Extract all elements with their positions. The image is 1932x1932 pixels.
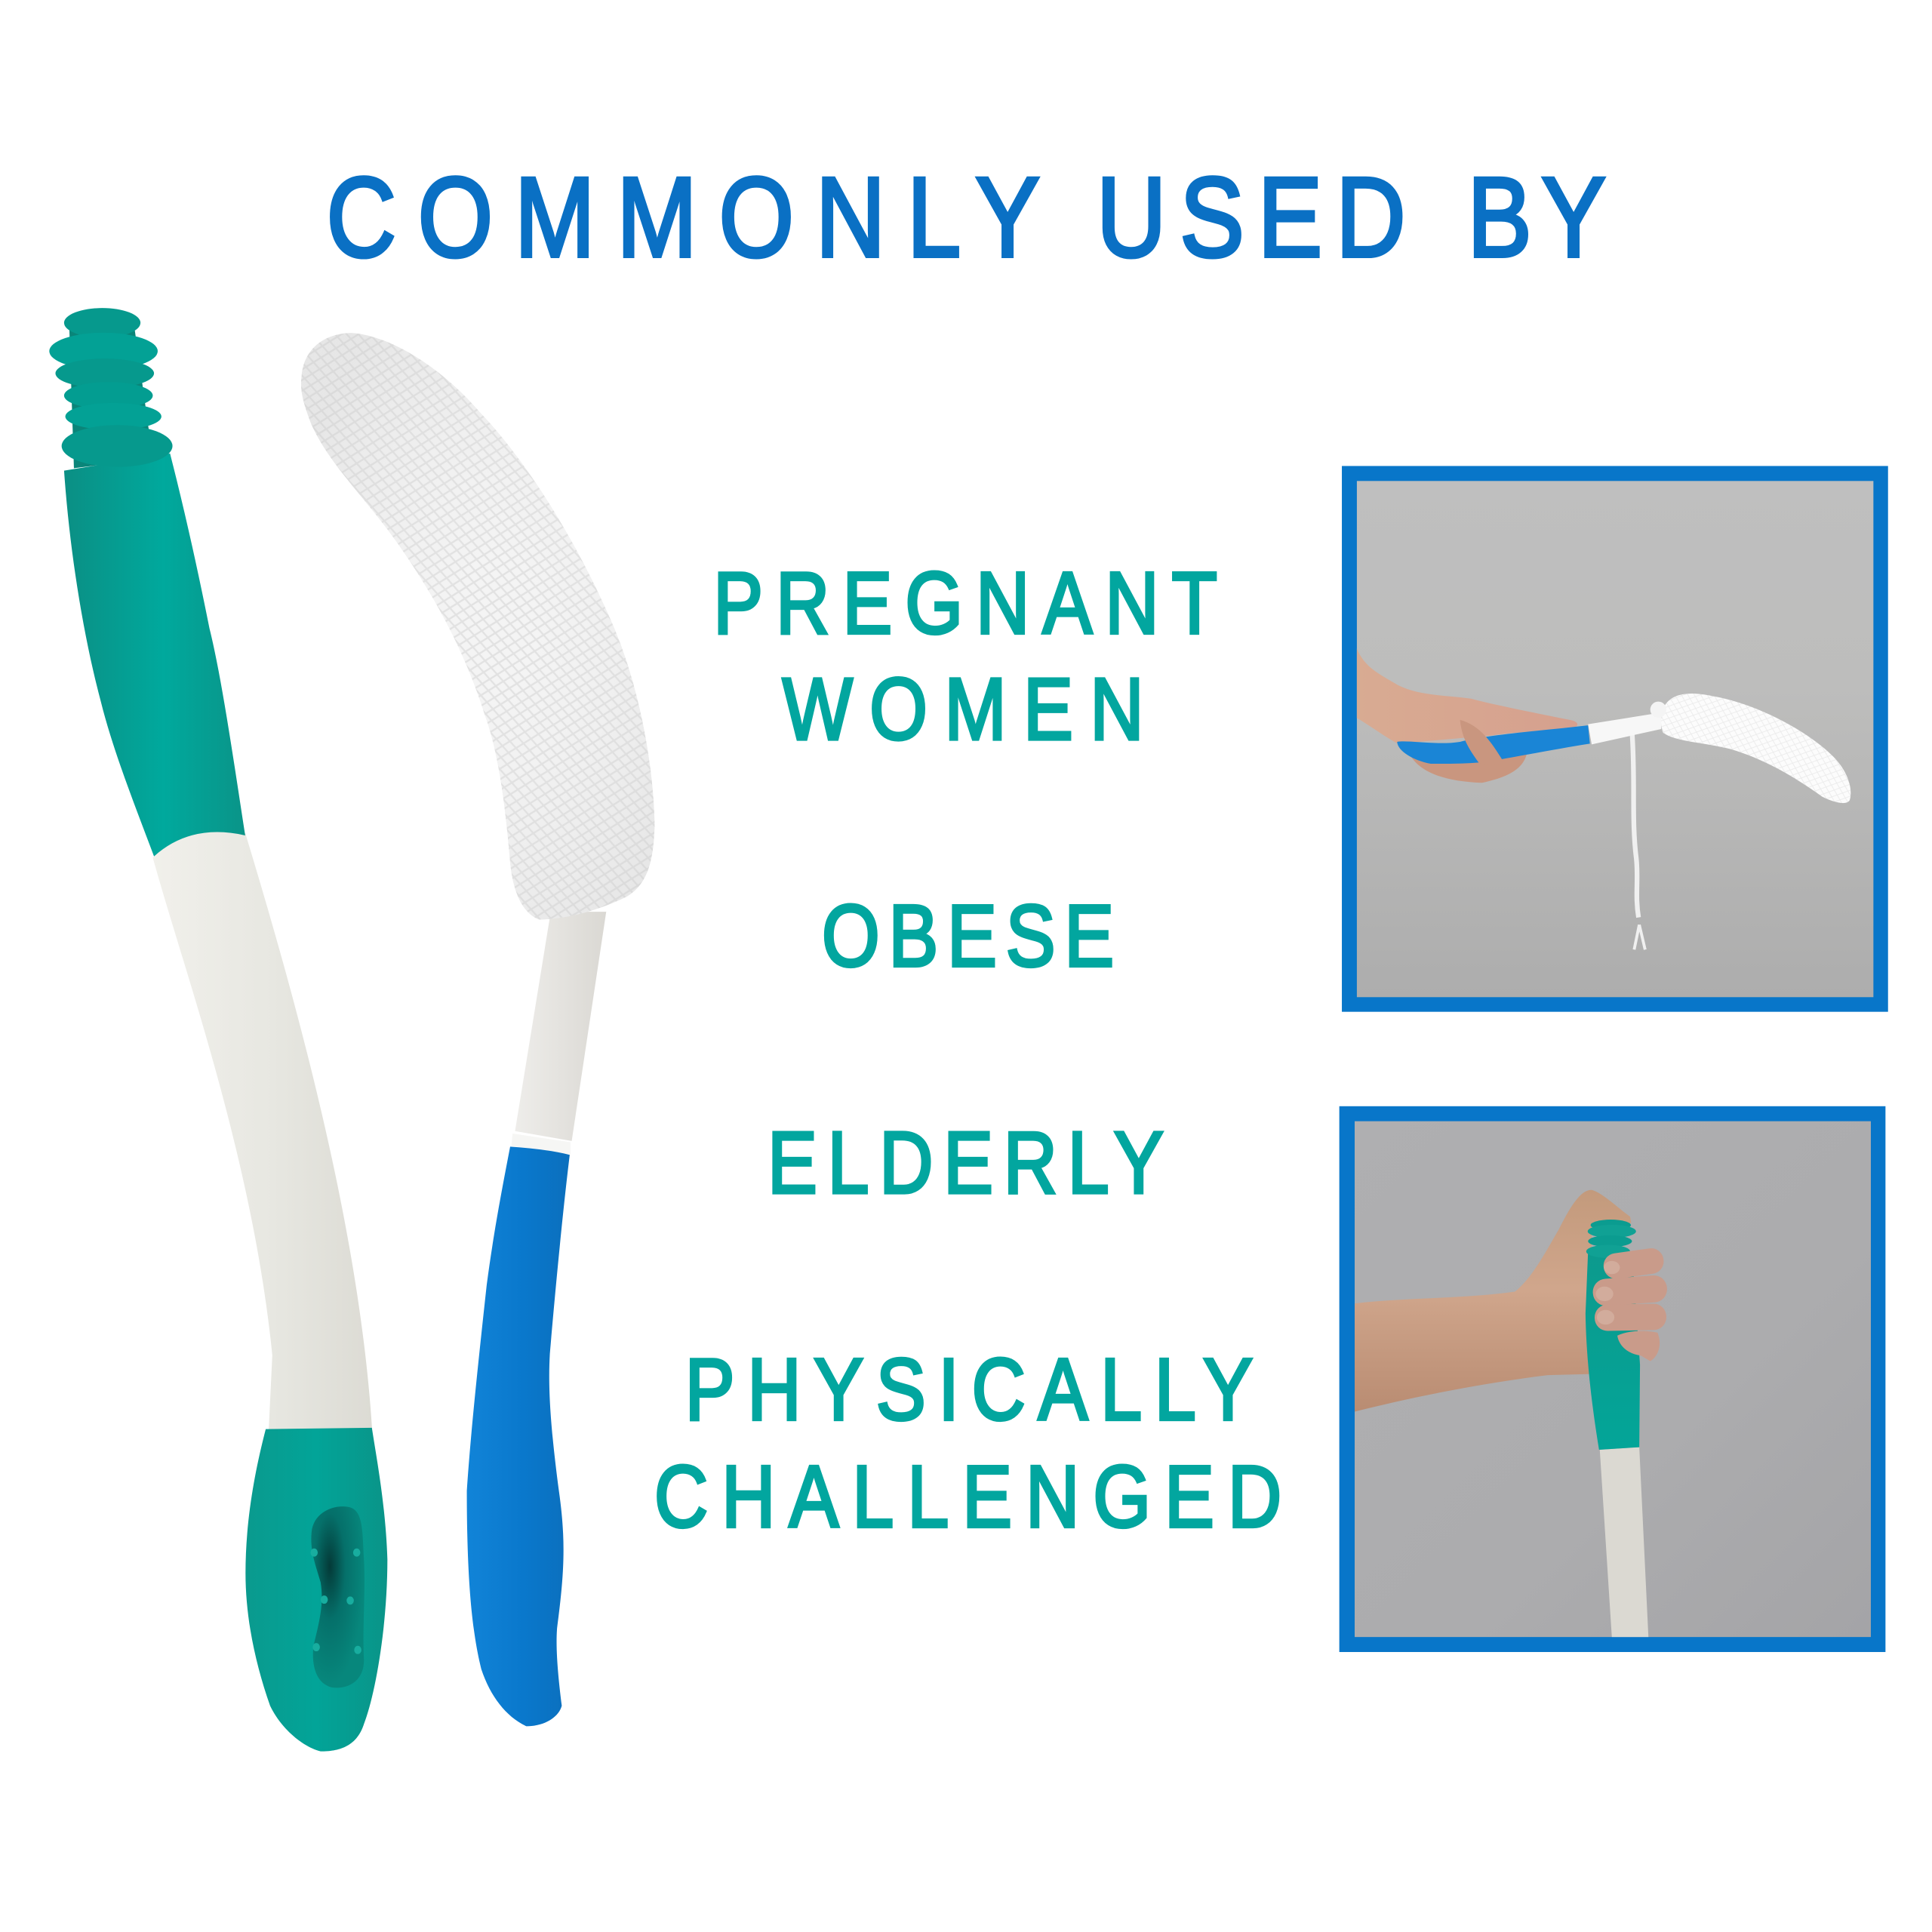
mesh sponge head (301, 333, 654, 920)
label: obese: OBESE (822, 887, 1114, 985)
label: physically challenged (654, 1340, 1281, 1546)
ribs (49, 308, 173, 467)
blue handle (1397, 725, 1590, 764)
blue handle (467, 1146, 570, 1726)
ribs (1586, 1220, 1636, 1258)
title: BY (1467, 154, 1606, 281)
label: pregnant women (713, 555, 1217, 758)
title: USED (1097, 154, 1405, 281)
forearm and palm (1355, 1190, 1631, 1412)
photo panel: hand holding blue wand with mesh sponge (1342, 466, 1888, 1012)
teal grip (1586, 1251, 1640, 1450)
hand and index finger (1357, 648, 1577, 743)
white shaft (1600, 1447, 1648, 1637)
label: physically challenged: PHYSICALLY (685, 1340, 1253, 1438)
fingernails (1595, 1261, 1620, 1324)
thumb (1460, 720, 1503, 765)
product: blue handle with mesh sponge (301, 333, 654, 1726)
label: pregnant women: WOMEN (783, 660, 1144, 758)
string with tassel (1632, 731, 1645, 949)
text block: user groups (654, 555, 1281, 1546)
grip body (64, 454, 245, 857)
ribbed core (69, 318, 152, 468)
photo panel: hand gripping teal wand (1340, 1106, 1885, 1652)
label: elderly: ELDERLY (768, 1114, 1164, 1211)
title: COMMONLY (327, 154, 1040, 281)
white collar (512, 1134, 571, 1155)
mesh head (1661, 694, 1850, 803)
title (327, 154, 1606, 281)
label: physically challenged: CHALLENGED (654, 1447, 1281, 1546)
product: teal wand with white shaft (49, 308, 387, 1752)
fingers (1592, 1247, 1668, 1361)
white shaft (152, 831, 372, 1432)
white shaft (515, 912, 606, 1141)
teal lower grip with finger hole (245, 1428, 387, 1752)
lower fingers (1409, 752, 1527, 783)
teal upper grip with ribbed end (49, 308, 245, 857)
label: pregnant women: PREGNANT (713, 555, 1217, 652)
white stem (1588, 712, 1661, 744)
